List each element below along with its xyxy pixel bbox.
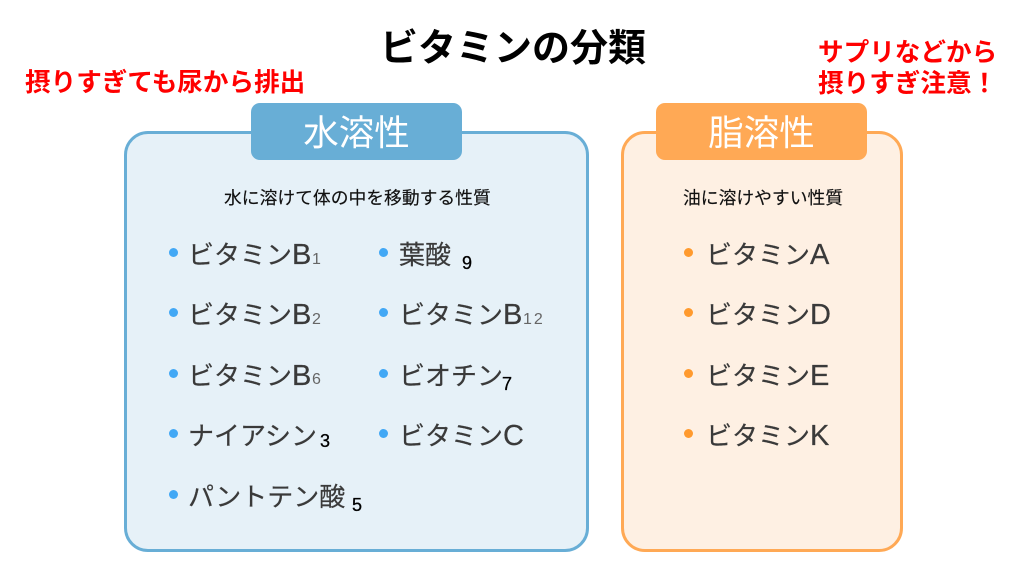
item: niacin B3: 3 xyxy=(320,431,330,451)
panel: fat-soluble xyxy=(621,131,903,552)
item: B1: ビタミンB xyxy=(188,239,311,271)
heading tab: fat-soluble xyxy=(656,103,867,160)
item: B6: ビタミンB xyxy=(188,360,311,392)
title: ビタミンの分類 xyxy=(380,28,646,70)
item: A: ビタミンA xyxy=(706,239,829,271)
item: B12: ビタミンB xyxy=(399,299,522,331)
item: folic acid B9 xyxy=(379,240,472,273)
item: niacin B3: ナイアシン xyxy=(188,421,317,451)
note: supplement caution xyxy=(818,39,997,98)
item: vitamin C: ビタミンC xyxy=(399,420,524,452)
list: water-soluble vitamins xyxy=(169,239,545,515)
item: D: ビタミンD xyxy=(706,299,831,331)
heading tab: fat-soluble: 脂溶性 xyxy=(708,113,815,153)
item: E: ビタミンE xyxy=(706,360,829,392)
description: water-soluble: 水に溶けて体の中を移動する性質 xyxy=(224,188,491,208)
panel: water-soluble xyxy=(124,131,589,552)
list: fat-soluble vitamins xyxy=(684,239,831,452)
note: supplement caution: 摂りすぎ注意！ xyxy=(818,70,997,98)
item: B6: 6 xyxy=(312,371,321,388)
item: B2: ビタミンB xyxy=(188,299,311,331)
item: folic acid B9: 9 xyxy=(462,253,472,273)
item: B2: 2 xyxy=(312,311,321,328)
item: biotin B7: 7 xyxy=(502,374,512,394)
item: pantothenic acid B5: 5 xyxy=(352,495,362,515)
item: biotin B7: ビオチン xyxy=(399,361,503,391)
heading tab: water-soluble xyxy=(251,103,462,160)
heading tab: water-soluble: 水溶性 xyxy=(303,113,410,153)
note: water-soluble excess: 摂りすぎても尿から排出 xyxy=(25,69,305,97)
description: fat-soluble: 油に溶けやすい性質 xyxy=(683,188,843,208)
note: supplement caution: サプリなどから xyxy=(818,39,997,67)
item: B12: 12 xyxy=(523,311,545,328)
item: folic acid B9: 葉酸 xyxy=(399,240,451,270)
item: B1: 1 xyxy=(312,251,321,268)
item: K: ビタミンK xyxy=(706,420,829,452)
item: pantothenic acid B5: パントテン酸 xyxy=(188,482,345,512)
